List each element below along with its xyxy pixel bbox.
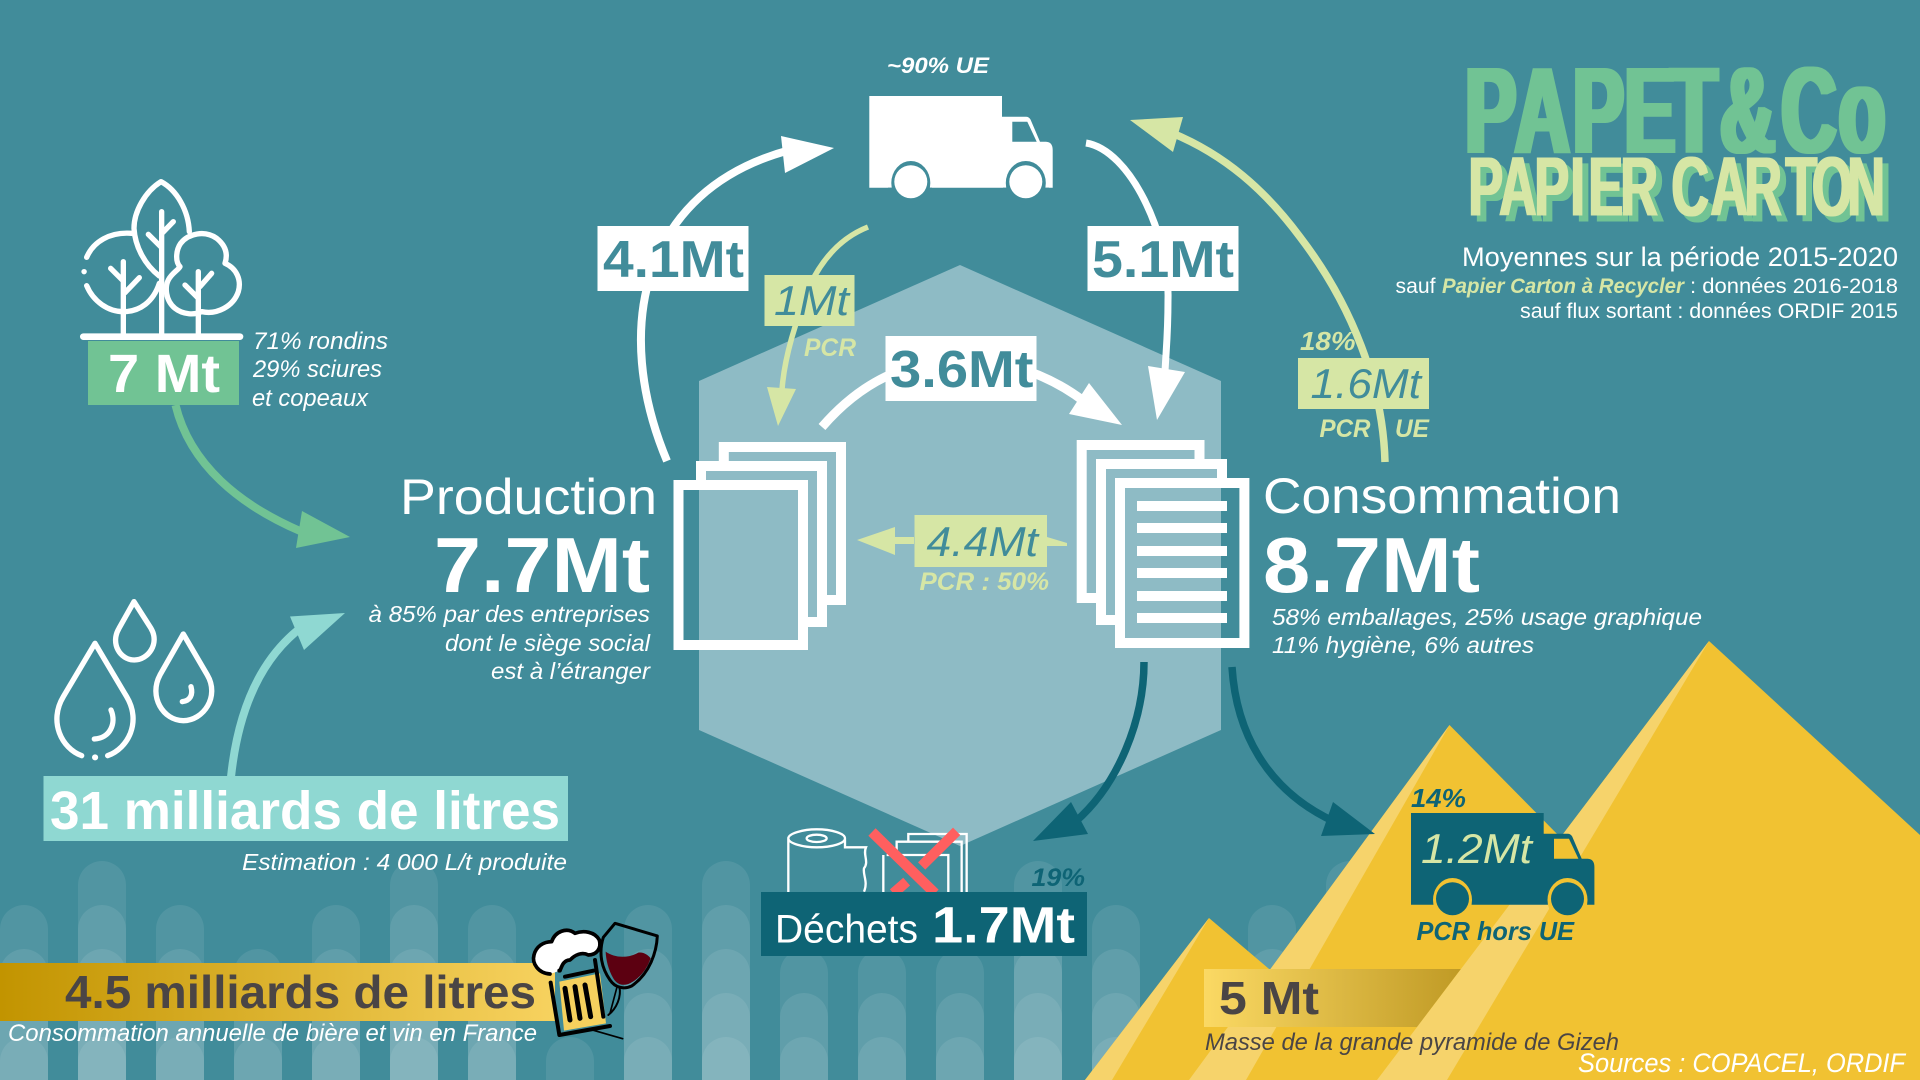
arrow: wood to production — [176, 405, 350, 548]
arrow: transport to consumption — [1086, 143, 1185, 420]
wood breakdown: 29% sciures — [252, 356, 382, 383]
icon: printed paper stack — [1082, 445, 1244, 643]
label: 1.6Mt PCR — [1298, 326, 1430, 443]
label: 1Mt PCR: PCR — [804, 334, 856, 362]
wood breakdown — [252, 328, 388, 412]
label: 4.4Mt PCR: 4.4Mt — [926, 518, 1040, 565]
label: 31 milliards de litres: 31 milliards de litres — [50, 781, 560, 841]
period notes: Papier Carton à Recycler — [1442, 275, 1686, 298]
arrow: recycled paper 4.4Mt — [857, 527, 1067, 555]
small pyramid — [1085, 918, 1400, 1080]
icon: paper roll and crossed paper — [788, 829, 967, 893]
arrow: water to production — [231, 613, 345, 777]
block: production: à 85% par des entreprises — [368, 601, 651, 627]
period notes: Moyennes sur la période 2015-2020 — [1462, 242, 1898, 272]
icon: export truck — [1411, 813, 1594, 922]
block: production: dont le siège social — [445, 630, 651, 656]
title: PAPIER CARTON — [1468, 140, 1885, 234]
block: consumption: 8.7Mt — [1263, 521, 1480, 609]
block: consumption: Consommation — [1263, 468, 1621, 524]
panel: waste total: Déchets — [775, 908, 918, 952]
title — [1465, 41, 1891, 240]
block: production: est à l’étranger — [491, 658, 651, 684]
period notes — [1396, 242, 1898, 323]
label: 4.1Mt: 4.1Mt — [603, 231, 744, 289]
middle pyramid — [1189, 725, 1800, 1080]
title: PAPET&Co — [1465, 41, 1885, 179]
label: 90% UE: ~90% UE — [887, 53, 990, 78]
pyramid caption: Masse de la grande pyramide de Gizeh — [1205, 1029, 1619, 1056]
block: production — [368, 469, 657, 684]
beer and wine caption: Consommation annuelle de bière et vin en France — [8, 1020, 537, 1047]
icon: white delivery truck — [869, 96, 1053, 205]
label: 1.6Mt PCR: 18% — [1300, 326, 1356, 356]
gizeh mass label: 5 Mt — [1219, 972, 1319, 1024]
arrow: PCR 1Mt — [767, 227, 868, 426]
gizeh mass label — [1204, 969, 1474, 1027]
arrow: production to consumption — [822, 360, 1122, 427]
icon: beer mug and wine glass — [534, 923, 657, 1039]
large pyramid — [1377, 641, 1920, 1080]
panel: waste total — [761, 892, 1087, 956]
period notes: sauf — [1396, 275, 1436, 298]
arrow: PCR exports — [1130, 117, 1385, 462]
label: 4.4Mt PCR — [914, 515, 1049, 596]
icon: trees — [83, 182, 240, 337]
icon: water drops — [57, 602, 212, 757]
export truck labels: PCR hors UE — [1416, 916, 1575, 946]
label: 1.6Mt PCR: PCR — [1320, 415, 1370, 443]
label: 1Mt PCR — [764, 275, 856, 362]
wood breakdown: 71% rondins — [253, 328, 388, 355]
label: 7 Mt: 7 Mt — [108, 344, 220, 404]
label: 1Mt PCR: 1Mt — [774, 277, 851, 324]
banner: 4.5 milliards de litres: 4.5 milliards de litres — [65, 966, 536, 1018]
block: consumption: 58% emballages, 25% usage graphique — [1272, 604, 1702, 630]
label: 1.6Mt PCR: 1.6Mt — [1310, 360, 1423, 407]
export truck labels: 14% — [1411, 783, 1466, 813]
label: 1.6Mt PCR: UE — [1395, 415, 1430, 443]
icon: blank paper stack — [678, 447, 841, 645]
period notes: sauf flux sortant : données ORDIF 2015 — [1520, 300, 1898, 323]
water estimate: Estimation : 4 000 L/t produite — [242, 849, 567, 875]
block: production: Production — [400, 469, 657, 525]
wood breakdown: et copeaux — [252, 385, 369, 412]
arrow: production to transport — [641, 136, 834, 461]
label: 19%: 19% — [1032, 864, 1085, 892]
arrow: consumption to waste — [1033, 662, 1144, 841]
sources: Sources : COPACEL, ORDIF — [1578, 1048, 1906, 1078]
block: consumption: 11% hygiène, 6% autres — [1272, 632, 1535, 658]
label: 4.4Mt PCR: PCR : 50% — [920, 568, 1049, 596]
panel: waste total: 1.7Mt — [932, 896, 1075, 954]
export truck labels: 1.2Mt — [1421, 825, 1534, 872]
title: PAPIER CARTON — [1474, 146, 1891, 240]
period notes: : données 2016-2018 — [1690, 275, 1898, 298]
block: production: 7.7Mt — [434, 521, 650, 609]
panel: central hexagon — [699, 265, 1221, 846]
label: 7 Mt — [88, 341, 239, 405]
arrow: consumption to exports — [1232, 667, 1375, 836]
block: consumption — [1263, 468, 1702, 658]
label: 5.1Mt: 5.1Mt — [1092, 231, 1234, 289]
label: 3.6Mt: 3.6Mt — [890, 341, 1034, 399]
export truck labels — [1411, 783, 1575, 946]
